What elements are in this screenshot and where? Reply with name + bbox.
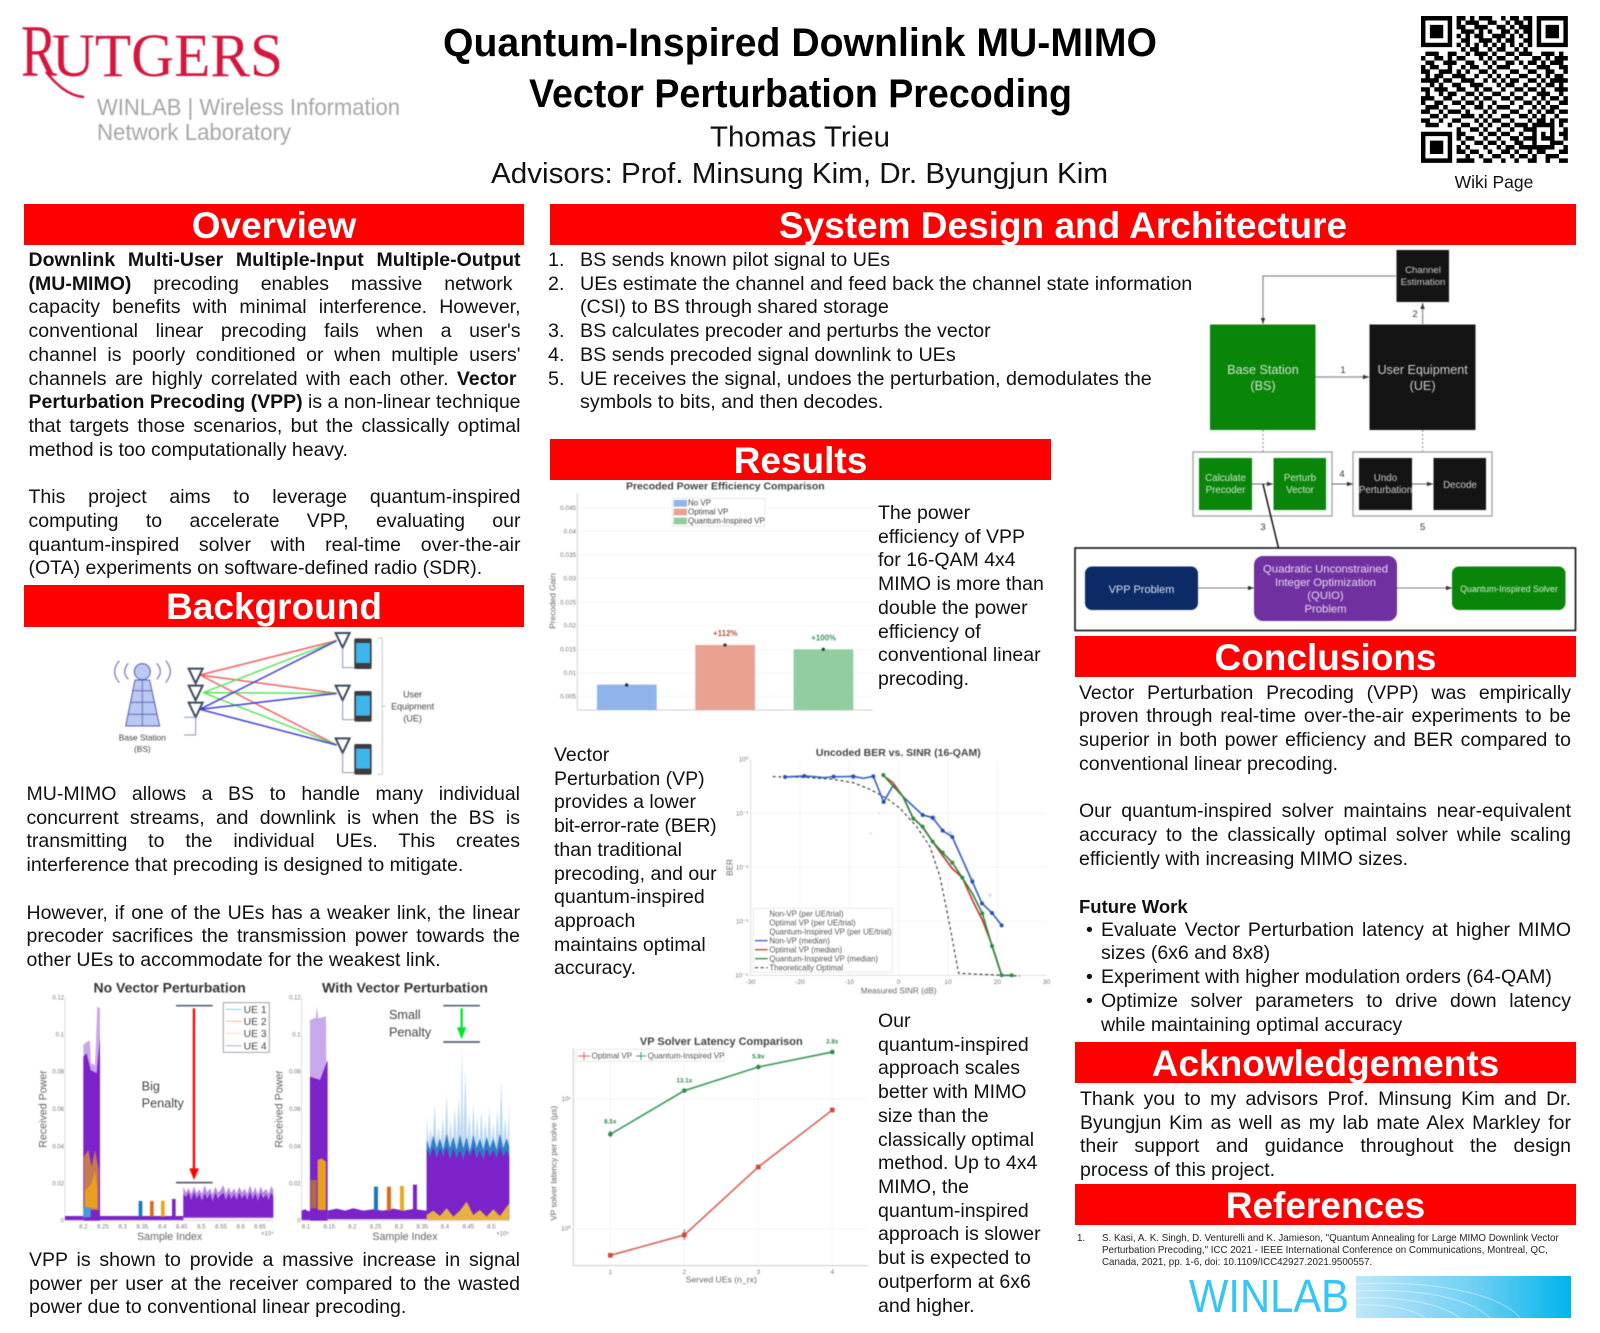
text: overview: channel is poorly conditioned or when multiple users' <box>28 344 520 366</box>
text: VPP power summary: VPP is shown to provide a massive increase in signal <box>29 1249 520 1271</box>
heading: References: References <box>1226 1185 1425 1226</box>
list: system steps: 2. <box>548 273 564 295</box>
text: reference list <box>1077 1233 1559 1268</box>
big penalty arrow: Big <box>142 1080 160 1094</box>
group: BS steps: Precoder <box>1206 485 1246 496</box>
text: background: other UEs to accommodate for the weakest link. <box>26 949 441 971</box>
text: conclusions and future work: Future Work <box>1079 896 1188 917</box>
list: system steps: BS sends known pilot signal to UEs <box>580 249 890 271</box>
bar labels: +112% <box>713 629 738 638</box>
text: background: concurrent streams, and downlink is when the BS is <box>26 807 520 829</box>
system block diagram: 5 <box>1420 522 1425 533</box>
box: QUIO problem: Integer Optimization <box>1275 577 1376 589</box>
box: QUIO problem: (QUIO) <box>1307 590 1344 602</box>
text: overview: This project aims to leverage quantum-inspired <box>28 486 520 508</box>
legend: Optimal VP <box>592 1052 632 1061</box>
text: conclusions and future work: Our quantum-inspired solver maintains near-equivalent <box>1079 800 1571 822</box>
text: acknowledgements: Byungjun Kim as well as my lab mate Alex Markley for <box>1080 1112 1571 1134</box>
text: latency result: Our <box>878 1010 911 1032</box>
list: system steps: 4. <box>548 344 564 366</box>
legend: Optimal VP (per UE/trial) <box>769 919 856 928</box>
bar chart: precoded power efficiency: 0.005 <box>560 694 576 701</box>
ratio labels: 2.8x <box>826 1038 839 1045</box>
list: system steps: BS sends precoded signal downlink to UEs <box>580 344 956 366</box>
group: UE steps <box>1353 452 1492 516</box>
text: background: precoder sacrifices the transmission power towards the <box>26 925 520 947</box>
text: latency result: approach is slower <box>878 1223 1041 1245</box>
bar labels <box>713 629 836 642</box>
icon: user antennas and phones <box>336 633 372 775</box>
title <box>443 21 1157 116</box>
heading: Background <box>24 585 524 627</box>
text: latency result: approach scales <box>878 1057 1020 1079</box>
bar chart: precoded power efficiency: 0.03 <box>564 575 576 582</box>
group: BS steps: Perturb <box>1284 473 1317 484</box>
text: overview: computing to accelerate VPP, evaluating our <box>28 510 520 532</box>
small penalty arrow <box>389 1006 480 1042</box>
big penalty arrow: Penalty <box>142 1096 185 1110</box>
line chart: uncoded BER vs SINR <box>726 748 1051 995</box>
small penalty arrow: Penalty <box>389 1025 432 1039</box>
chart: received power, no vector perturbation: 8.45 <box>176 1224 188 1230</box>
chart: received power, with vector perturbation: 0.08 <box>289 1070 301 1076</box>
heading: Background: Background <box>166 586 382 627</box>
system block diagram: 1 <box>1340 365 1346 376</box>
chart: received power, with vector perturbation: 0.1 <box>292 1033 301 1039</box>
text: latency result: and higher. <box>878 1295 975 1317</box>
chart title: With Vector Perturbation <box>322 980 488 996</box>
text: power efficiency result: double the power <box>878 597 1028 619</box>
logo: WINLAB <box>1189 1270 1571 1322</box>
chart: received power, no vector perturbation: 8.25 <box>97 1224 109 1230</box>
text: overview: channels are highly correlated with each other. Vector <box>28 368 516 390</box>
text: latency result: but is expected to <box>878 1247 1031 1269</box>
heading: Conclusions <box>1075 636 1576 677</box>
chart: received power, with vector perturbation: Sample Index <box>372 1231 438 1243</box>
bar chart: precoded power efficiency: Precoded Gain <box>548 573 558 629</box>
bar chart: precoded power efficiency: 0.045 <box>560 505 576 512</box>
chart: received power, no vector perturbation: 0.12 <box>52 995 65 1001</box>
list: system steps: symbols to bits, and then decodes. <box>580 391 883 413</box>
chart: received power, no vector perturbation: Sample Index <box>137 1231 203 1243</box>
chart: received power, no vector perturbation: 8.55 <box>215 1224 227 1230</box>
heading: Conclusions: Conclusions <box>1214 637 1437 678</box>
bar chart: precoded power efficiency: 0.04 <box>564 528 576 535</box>
bar chart: precoded power efficiency: 0.01 <box>564 670 576 677</box>
text: acknowledgements: process of this project. <box>1080 1159 1275 1181</box>
text: conclusions and future work: Evaluate Vector Perturbation latency at higher MIMO <box>1101 919 1571 941</box>
text: reference list: 1. <box>1077 1233 1085 1244</box>
heading: Acknowledgements <box>1075 1042 1576 1083</box>
chart: received power, no vector perturbation: 0.02 <box>52 1182 65 1188</box>
text: power efficiency result: The power <box>878 502 970 524</box>
text: conclusions and future work: • <box>1086 966 1093 988</box>
text: acknowledgements <box>1080 1088 1571 1181</box>
logo: Rutgers WINLAB: WINLAB | Wireless Information <box>97 94 400 120</box>
group: UE steps: Decode <box>1443 480 1477 491</box>
legend: Quantum-Inspired VP <box>688 517 765 526</box>
text: overview: conventional linear precoding fails when a user's <box>28 320 520 342</box>
system block diagram: 2 <box>1412 309 1418 320</box>
big penalty arrow <box>142 1006 213 1183</box>
box: base station: Base Station <box>1227 363 1299 377</box>
text: background: transmitting to the individual UEs. This creates <box>26 830 520 852</box>
text: background: However, if one of the UEs has a weaker link, the linear <box>26 902 520 924</box>
text: latency result: classically optimal <box>878 1129 1034 1151</box>
text: background: MU-MIMO allows a BS to handle many individual <box>26 783 520 805</box>
ratio labels <box>604 1038 839 1125</box>
chart: received power, with vector perturbation: 8.4 <box>441 1224 450 1230</box>
text: conclusions and future work: accuracy to the classically optimal solver while scaling <box>1079 824 1571 846</box>
heading: Overview <box>24 204 524 245</box>
group: UE steps: Perturbation <box>1359 485 1412 496</box>
chart: received power, no vector perturbation: 0.1 <box>56 1033 65 1039</box>
box: channel estimation: Estimation <box>1401 277 1445 288</box>
chart: received power, no vector perturbation: 8.65 <box>254 1224 266 1230</box>
group: BS steps: Calculate <box>1205 473 1246 484</box>
text: conclusions and future work: Experiment with higher modulation orders (64-QAM) <box>1101 966 1552 988</box>
bar chart: precoded power efficiency: 0.025 <box>560 599 576 606</box>
text: latency result: quantum-inspired <box>878 1200 1029 1222</box>
heading: System Design and Architecture: System Design and Architecture <box>779 205 1347 246</box>
line chart: VP solver latency: 10¹ <box>562 1096 571 1103</box>
line chart: VP solver latency <box>549 1036 868 1285</box>
line chart: uncoded BER vs SINR: BER <box>726 859 735 876</box>
QR code <box>1421 18 1568 161</box>
text: overview: that targets those scenarios, but the classically optimal <box>28 415 520 437</box>
chart title: No Vector Perturbation <box>93 979 246 995</box>
text: VPP power summary <box>29 1249 520 1318</box>
chart: received power, no vector perturbation: 8.35 <box>136 1224 149 1230</box>
list: system steps: UEs estimate the channel and feed back the channel state information <box>580 273 1192 295</box>
text: conclusions and future work: proven through real-time over-the-air experiments to be <box>1079 705 1571 727</box>
legend <box>753 908 892 972</box>
legend: Theoretically Optimal <box>769 963 843 972</box>
text: conclusions and future work <box>1079 682 1571 1036</box>
line chart: VP solver latency: Served UEs (n_rx) <box>686 1275 757 1285</box>
chart: received power, no vector perturbation: 8.2 <box>79 1224 88 1230</box>
legend <box>576 1049 724 1061</box>
chart: received power, no vector perturbation: 0 <box>61 1219 65 1225</box>
logo: Rutgers WINLAB: R <box>21 11 57 93</box>
connector line <box>1263 484 1278 548</box>
list: system steps: BS calculates precoder and perturbs the vector <box>580 320 991 342</box>
box: quantum-inspired solver <box>1452 566 1566 610</box>
text: VPP power summary: power due to conventional linear precoding. <box>29 1296 406 1318</box>
box: user equipment: (UE) <box>1410 379 1436 393</box>
box: QUIO problem: Quadratic Unconstrained <box>1263 564 1388 576</box>
text: conclusions and future work: • <box>1086 919 1093 941</box>
chart: received power, with vector perturbation: 0 <box>297 1219 301 1225</box>
label: base station <box>119 732 166 754</box>
chart: received power, no vector perturbation: 8.4 <box>158 1224 167 1230</box>
text: BER result: bit-error-rate (BER) <box>554 815 716 837</box>
text: BER result: than traditional <box>554 839 682 861</box>
heading: Results: Results <box>734 440 867 481</box>
legend: Quantum-Inspired VP (per UE/trial) <box>769 928 892 937</box>
text: conclusions and future work: • <box>1086 990 1093 1012</box>
logo: Rutgers WINLAB: UTGERS <box>52 23 283 90</box>
text: BER result: quantum-inspired <box>554 886 705 908</box>
text: latency result: better with MIMO <box>878 1081 1026 1103</box>
text: power efficiency result: MIMO is more than <box>878 573 1044 595</box>
text: power efficiency result: efficiency of <box>878 621 981 643</box>
line chart: VP solver latency: 4 <box>830 1269 834 1276</box>
chart: received power, no vector perturbation: ×10⁴ <box>261 1231 274 1238</box>
box: user equipment: User Equipment <box>1377 363 1468 377</box>
line chart: uncoded BER vs SINR: -30 <box>746 979 756 986</box>
text: conclusions and future work: superior in both power efficiency and BER compared to <box>1079 729 1571 751</box>
chart: received power, with vector perturbation: ×10⁴ <box>496 1231 509 1238</box>
text: overview: (MU-MIMO) precoding enables massive network <box>28 273 512 295</box>
text: BER result: approach <box>554 910 635 932</box>
heading: Overview: Overview <box>192 205 356 246</box>
text: power efficiency result <box>878 502 1044 690</box>
author: Thomas Trieu <box>710 122 890 154</box>
text: reference list: S. Kasi, A. K. Singh, D. Venturelli and K. Jamieson, "Quantum Annealing for Large MIMO Downlink Vector <box>1102 1233 1559 1244</box>
line chart: uncoded BER vs SINR: 10⁻² <box>736 864 748 871</box>
system block diagram: 4 <box>1339 469 1345 480</box>
system block diagram <box>1075 250 1576 630</box>
list: system steps <box>548 249 1192 413</box>
box: user equipment <box>1370 324 1476 430</box>
chart title: VP Solver Latency Comparison <box>640 1036 803 1048</box>
text: VPP power summary: power per user at the receiver compared to the wasted <box>29 1273 520 1295</box>
label: user equipment <box>391 690 435 724</box>
signal paths <box>200 641 337 745</box>
list: system steps: 3. <box>548 320 564 342</box>
legend: Non-VP (per UE/trial) <box>769 910 844 919</box>
text: reference list: Canada, 2021, pp. 1-6, doi: 10.1109/ICC42927.2021.9500557. <box>1102 1257 1372 1268</box>
chart: received power, no vector perturbation: 8.5 <box>197 1224 206 1230</box>
chart: received power, with vector perturbation: 0.04 <box>289 1144 301 1150</box>
quantum-inspired VP series <box>608 1050 835 1137</box>
data scatter and series <box>773 773 1020 977</box>
background diagram: base station to user equipment <box>115 633 435 775</box>
text: conclusions and future work: conventional linear precoding. <box>1079 753 1338 775</box>
bar chart: precoded power efficiency: 0.035 <box>560 552 576 559</box>
legend: Quantum-Inspired VP (median) <box>769 954 878 963</box>
logo: Rutgers WINLAB <box>21 11 400 145</box>
legend: UE 1 <box>244 1005 267 1016</box>
label: user equipment: User <box>403 690 422 700</box>
line chart: uncoded BER vs SINR: 10⁰ <box>739 756 749 763</box>
list: system steps: (CSI) to BS through shared storage <box>580 296 889 318</box>
list: system steps: 5. <box>548 368 564 390</box>
bar chart: precoded power efficiency <box>548 482 873 710</box>
box: channel estimation: Channel <box>1405 265 1441 276</box>
chart: received power, no vector perturbation: 8.6 <box>236 1224 245 1230</box>
chart: received power, no vector perturbation <box>38 979 274 1243</box>
text: overview: quantum-inspired solver with real-time over-the-air <box>28 534 520 556</box>
text: power efficiency result: precoding. <box>878 668 969 690</box>
legend: Quantum-Inspired VP <box>648 1052 724 1061</box>
group: UE steps: Undo <box>1374 473 1398 484</box>
chart: received power, no vector perturbation: 0.04 <box>52 1144 65 1150</box>
ratio labels: 13.1x <box>676 1078 693 1085</box>
chart: received power, with vector perturbation: 8.5 <box>487 1224 496 1230</box>
logo: Rutgers WINLAB: Network Laboratory <box>97 119 291 145</box>
chart: received power, no vector perturbation: 0.06 <box>52 1107 65 1113</box>
legend: UE 3 <box>244 1029 267 1040</box>
box: QUIO problem <box>1254 556 1397 621</box>
line chart: uncoded BER vs SINR: 20 <box>994 979 1001 986</box>
chart: received power, with vector perturbation: 0.02 <box>289 1182 301 1188</box>
line chart: uncoded BER vs SINR: 10 <box>944 979 952 986</box>
legend: Non-VP (median) <box>769 936 830 945</box>
bar labels: +100% <box>811 633 836 642</box>
text: BER result: precoding, and our <box>554 863 717 885</box>
small penalty arrow: Small <box>389 1008 421 1022</box>
box: QUIO problem: Problem <box>1304 604 1347 616</box>
line chart: uncoded BER vs SINR: -10 <box>845 979 854 986</box>
line chart: VP solver latency: 10⁰ <box>561 1226 571 1233</box>
box: base station <box>1210 324 1316 430</box>
text: conclusions and future work: sizes (6x6 and 8x8) <box>1101 942 1270 964</box>
line chart: uncoded BER vs SINR: 10⁻³ <box>736 918 748 925</box>
chart: received power, no vector perturbation: Received Power <box>38 1070 50 1148</box>
bar chart: precoded power efficiency: 0.02 <box>564 623 576 630</box>
legend: UE 4 <box>244 1041 267 1052</box>
line chart: VP solver latency: VP solver latency per solve (µs) <box>549 1106 558 1221</box>
chart: received power, no vector perturbation: 0.08 <box>52 1070 65 1076</box>
icon: base station tower <box>115 661 170 726</box>
chart: received power, with vector perturbation: 8.25 <box>370 1224 382 1230</box>
text: power efficiency result: efficiency of VPP <box>878 526 1025 548</box>
ratio labels: 5.9x <box>752 1054 765 1061</box>
heading: Acknowledgements: Acknowledgements <box>1152 1043 1499 1084</box>
legend <box>223 1003 269 1052</box>
panel: VPP pipeline <box>1075 548 1576 630</box>
box: channel estimation <box>1396 250 1449 302</box>
text: latency result: quantum-inspired <box>878 1034 1029 1056</box>
heading: References <box>1075 1184 1576 1225</box>
text: acknowledgements: Thank you to my advisors Prof. Minsung Kim and Dr. <box>1080 1088 1571 1110</box>
line chart: VP solver latency: 3 <box>756 1269 760 1276</box>
text: latency result: MIMO, the <box>878 1176 969 1198</box>
line chart: VP solver latency: 1 <box>608 1269 612 1276</box>
text: power efficiency result: for 16-QAM 4x4 <box>878 549 1016 571</box>
label: user equipment: Equipment <box>391 702 435 712</box>
line chart: uncoded BER vs SINR: Measured SINR (dB) <box>861 986 937 995</box>
box: VPP problem: VPP Problem <box>1109 584 1174 596</box>
text: overview: Perturbation Precoding (VPP) is a non-linear technique <box>28 391 521 413</box>
text: overview: (OTA) experiments on software-defined radio (SDR). <box>28 557 482 579</box>
icon: base station antennas <box>184 669 203 735</box>
text: overview <box>28 249 521 579</box>
group: BS steps: Vector <box>1286 485 1315 496</box>
heading: System Design and Architecture <box>550 204 1576 245</box>
text: latency result: method. Up to 4x4 <box>878 1152 1037 1174</box>
box: quantum-inspired solver: Quantum-Inspired Solver <box>1460 584 1558 594</box>
chart: received power, with vector perturbation: 8.15 <box>323 1224 336 1230</box>
text: overview: Downlink Multi-User Multiple-Input Multiple-Output <box>28 249 520 271</box>
text: background <box>26 783 520 971</box>
heading: Results <box>550 439 1051 480</box>
text: latency result: size than the <box>878 1105 989 1127</box>
label: base station: Base Station <box>119 732 166 742</box>
bars <box>597 643 853 710</box>
legend: UE 2 <box>244 1017 267 1028</box>
list: system steps: UE receives the signal, undoes the perturbation, demodulates the <box>580 368 1152 390</box>
line chart: uncoded BER vs SINR: 30 <box>1043 979 1051 986</box>
text: BER result: accuracy. <box>554 957 636 979</box>
legend: Optimal VP <box>688 508 728 517</box>
bar chart: precoded power efficiency: 0.015 <box>560 647 576 654</box>
legend <box>672 498 765 526</box>
line chart: uncoded BER vs SINR: 0 <box>897 979 901 986</box>
label: base station: (BS) <box>134 744 151 754</box>
text: reference list: Perturbation Precoding," ICC 2021 - IEEE International Conference on Communications, Montreal, QC, <box>1102 1245 1548 1256</box>
text: acknowledgements: their support and guidance throughout the design <box>1080 1135 1571 1157</box>
group: BS steps <box>1193 452 1332 516</box>
text: power efficiency result: conventional linear <box>878 644 1041 666</box>
text: conclusions and future work: Vector Perturbation Precoding (VPP) was empirically <box>1079 682 1571 704</box>
list: system steps: 1. <box>548 249 564 271</box>
text: overview: method is too computationally heavy. <box>28 439 348 461</box>
text: latency result <box>878 1010 1041 1317</box>
chart: received power, with vector perturbation: 0.12 <box>289 995 301 1001</box>
text: conclusions and future work: Optimize solver parameters to drive down latency <box>1101 990 1571 1012</box>
advisors: Advisors: Prof. Minsung Kim, Dr. Byungjun Kim <box>491 158 1108 190</box>
text: conclusions and future work: while maintaining optimal accuracy <box>1101 1014 1402 1036</box>
bracket <box>377 638 386 774</box>
text: BER result: maintains optimal <box>554 934 706 956</box>
chart: received power, with vector perturbation: 8.3 <box>395 1224 404 1230</box>
chart: received power, with vector perturbation: 8.1 <box>302 1224 311 1230</box>
data traces <box>65 1007 273 1221</box>
legend: Optimal VP (median) <box>769 945 843 954</box>
chart: received power, with vector perturbation: 8.2 <box>348 1224 357 1230</box>
chart: received power, with vector perturbation: 0.06 <box>289 1107 301 1113</box>
text: conclusions and future work: efficiently with increasing MIMO sizes. <box>1079 848 1408 870</box>
title: Quantum-Inspired Downlink MU-MIMO <box>443 21 1157 65</box>
box: VPP problem <box>1085 566 1198 610</box>
line chart: uncoded BER vs SINR: 10⁻⁴ <box>735 972 749 979</box>
QR caption: Wiki Page <box>1455 172 1533 192</box>
logo: WINLAB: WINLAB <box>1189 1270 1349 1322</box>
box: base station: (BS) <box>1250 379 1276 393</box>
text: latency result: outperform at 6x6 <box>878 1271 1031 1293</box>
chart: received power, with vector perturbation <box>274 980 509 1243</box>
legend: No VP <box>688 499 711 508</box>
label: user equipment: (UE) <box>403 714 422 724</box>
chart: received power, with vector perturbation: Received Power <box>274 1070 286 1148</box>
text: BER result: Vector <box>554 744 609 766</box>
text: overview: capacity benefits with minimal interference. However, <box>28 296 520 318</box>
chart: received power, with vector perturbation: 8.35 <box>416 1224 429 1230</box>
optimal VP series <box>608 1108 835 1258</box>
line chart: VP solver latency: 2 <box>682 1269 686 1276</box>
chart: received power, with vector perturbation: 8.45 <box>462 1224 475 1230</box>
text: BER result <box>554 744 717 979</box>
chart title: Uncoded BER vs. SINR (16-QAM) <box>816 748 981 759</box>
line chart: uncoded BER vs SINR: -20 <box>795 979 805 986</box>
text: BER result: Perturbation (VP) <box>554 768 705 790</box>
text: background: interference that precoding is designed to mitigate. <box>26 854 463 876</box>
text: BER result: provides a lower <box>554 791 696 813</box>
ratio labels: 8.5x <box>604 1118 617 1125</box>
system block diagram: 3 <box>1260 522 1266 533</box>
line chart: uncoded BER vs SINR: 10⁻¹ <box>736 810 748 817</box>
chart: received power, no vector perturbation: 8.3 <box>118 1224 127 1230</box>
data traces <box>302 1006 509 1221</box>
title: Vector Perturbation Precoding <box>529 72 1072 116</box>
chart title: Precoded Power Efficiency Comparison <box>626 482 825 493</box>
